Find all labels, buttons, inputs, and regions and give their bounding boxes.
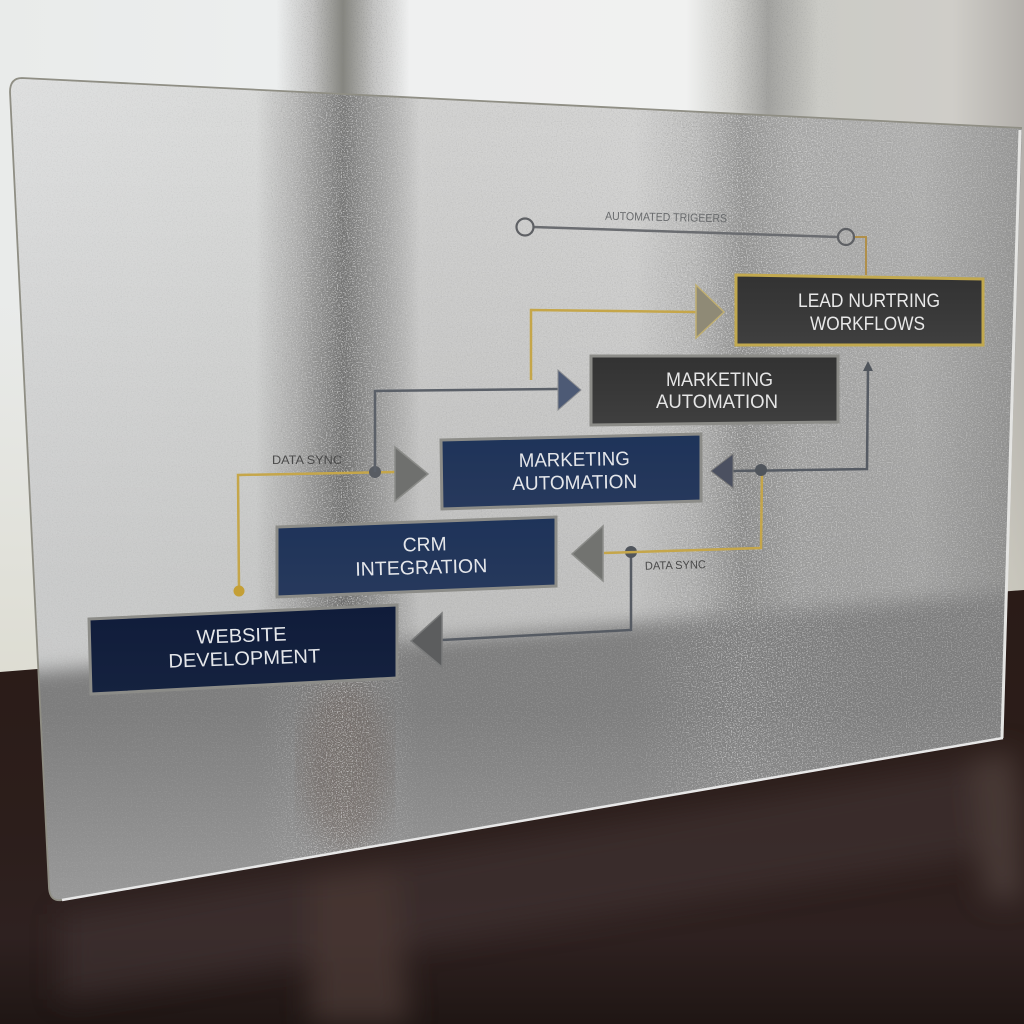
box: crm integration bbox=[277, 517, 556, 597]
box: crm integration: INTEGRATION bbox=[355, 555, 488, 581]
right edge highlight bbox=[1002, 130, 1020, 738]
box: website development: WEBSITE bbox=[196, 623, 287, 649]
label: data sync right: DATA SYNC bbox=[645, 559, 706, 573]
label: data sync left: DATA SYNC bbox=[272, 455, 342, 467]
connector: website to marketing automation bbox=[234, 447, 428, 596]
wooden table bbox=[0, 590, 1024, 1024]
box: lead nurturing workflows: LEAD NURTRING bbox=[798, 290, 940, 312]
connector: crm to marketing automation dark bbox=[375, 370, 581, 472]
automated triggers connector bbox=[516, 211, 866, 275]
connector: return to crm bbox=[572, 470, 762, 581]
glass edge bbox=[10, 78, 1022, 900]
connector: automation to lead nurturing bbox=[531, 285, 724, 380]
connector: return to website bbox=[411, 546, 637, 667]
box: marketing automation dark: AUTOMATION bbox=[656, 391, 778, 413]
box: marketing automation dark: MARKETING bbox=[666, 369, 773, 391]
box: marketing automation dark bbox=[591, 356, 838, 425]
box: lead nurturing workflows bbox=[736, 275, 983, 345]
connector: return to marketing automation bbox=[711, 361, 873, 488]
background wall bbox=[0, 0, 1024, 700]
table reflection bbox=[60, 750, 1024, 1024]
label: automated triggers: AUTOMATED TRIGEERS bbox=[605, 211, 727, 225]
box: crm integration: CRM bbox=[402, 533, 447, 556]
box: website development bbox=[89, 605, 397, 694]
box: marketing automation blue bbox=[441, 434, 701, 509]
box: website development: DEVELOPMENT bbox=[168, 645, 321, 673]
bright lower edge bbox=[62, 738, 1003, 900]
box: marketing automation blue: MARKETING bbox=[519, 448, 630, 472]
box: lead nurturing workflows: WORKFLOWS bbox=[810, 313, 925, 335]
box: marketing automation blue: AUTOMATION bbox=[512, 471, 637, 495]
